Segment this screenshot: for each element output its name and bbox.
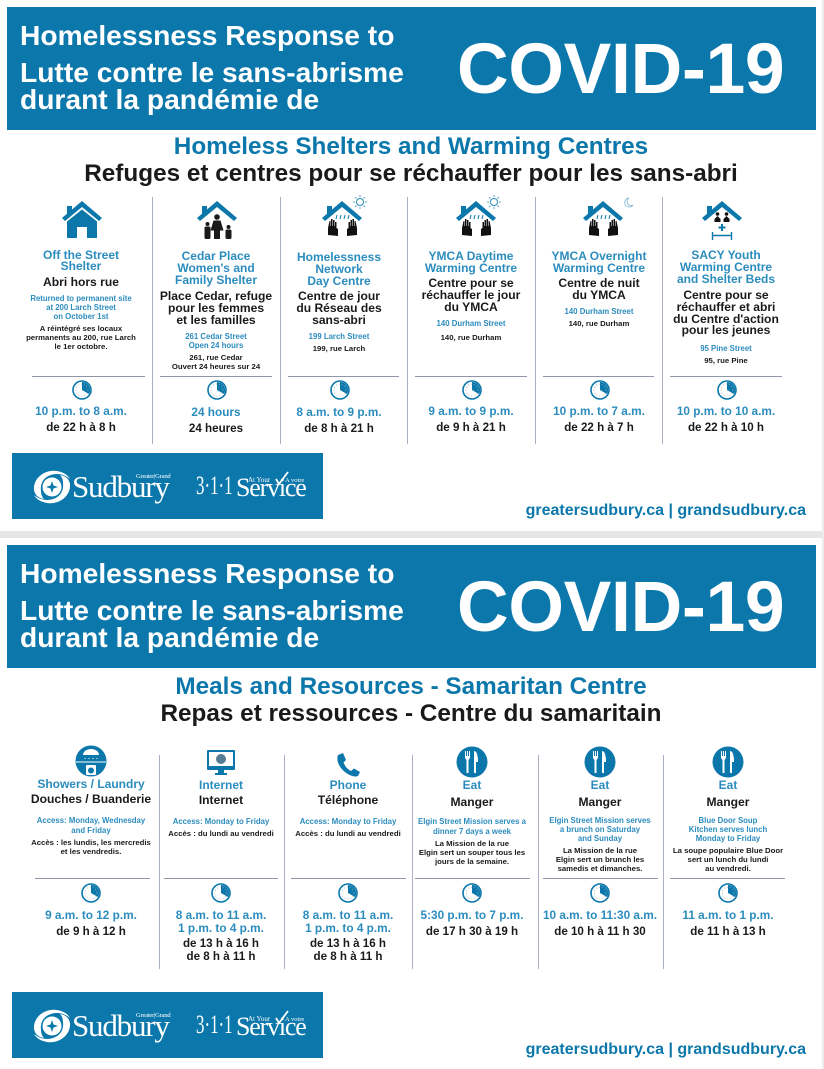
french name: du Centre d'action	[673, 312, 779, 326]
wordmark: Service: Service	[236, 1012, 306, 1041]
hours french	[146, 937, 296, 963]
french access	[31, 838, 151, 856]
hours french: de 13 h à 16 h	[310, 937, 386, 950]
hours english: 8 a.m. to 9 p.m.	[296, 405, 382, 419]
hours english: 11 a.m. to 1 p.m.	[682, 908, 774, 922]
wordmark: A votre: A votre	[285, 477, 304, 484]
hours english: 10 p.m. to 10 a.m.	[677, 404, 775, 418]
hours english: 10 p.m. to 8 a.m.	[35, 404, 127, 418]
clock icon	[717, 380, 737, 400]
french details: permanents au 200, rue Larch	[26, 333, 136, 342]
french address: 199, rue Larch	[313, 344, 365, 353]
icon: fork and knife	[584, 746, 616, 778]
section title: meals english: Meals and Resources - Samaritan Centre	[175, 673, 647, 700]
french name: Douches / Buanderie	[31, 792, 151, 806]
english address: 95 Pine Street	[700, 344, 752, 353]
centre name: Warming Centre	[425, 261, 517, 275]
column: Homelessness Network	[296, 195, 382, 435]
french name	[160, 289, 272, 327]
french name: pour les femmes	[168, 301, 264, 315]
shelter name: Cedar Place	[182, 249, 250, 263]
shelter name	[43, 248, 119, 273]
english details: a brunch on Saturday	[560, 825, 640, 834]
french name	[673, 288, 779, 337]
english address: 199 Larch Street	[309, 332, 369, 341]
header banner: meals: Homelessness Response to	[20, 557, 394, 589]
hours french: de 11 h à 13 h	[690, 925, 766, 938]
french name: du YMCA	[572, 288, 626, 302]
french name: Téléphone	[318, 793, 378, 807]
english details: 261 Cedar Street	[185, 332, 247, 341]
column: Showers / Laundry	[31, 746, 151, 938]
header banner: shelters: Homelessness Response to	[20, 19, 394, 51]
wordmark: 311: 3·1·1	[196, 1010, 233, 1039]
clock icon	[462, 380, 482, 400]
column: Eat, Blue Door	[663, 745, 793, 995]
french details: La Mission de la rue	[563, 846, 637, 855]
hours english: 24 hours	[191, 405, 241, 419]
french name: du YMCA	[444, 300, 498, 314]
hours english: 9 a.m. to 9 p.m.	[428, 404, 514, 418]
header banner: meals: durant la pandémie de	[20, 621, 319, 653]
french name: Centre de nuit	[558, 276, 640, 290]
clock icon	[462, 883, 482, 903]
header banner: shelters: COVID-19	[457, 29, 784, 109]
logo panel: shelters	[12, 453, 323, 519]
english details	[30, 294, 132, 321]
french name: Centre pour se	[428, 276, 514, 290]
hours french: de 17 h 30 à 19 h	[426, 925, 518, 938]
shelter name	[175, 249, 257, 287]
french details	[525, 846, 675, 874]
french details: La soupe populaire Blue Door	[673, 846, 783, 855]
website link: greatersudbury.ca | grandsudbury.ca	[526, 1041, 806, 1058]
header banner: shelters: Lutte contre le sans-abrisme	[20, 56, 404, 88]
wordmark: 311: 3·1·1	[196, 471, 233, 500]
hours english	[146, 909, 296, 935]
hours french: 24 heures	[189, 422, 243, 435]
hours french: de 8 h à 11 h	[187, 950, 255, 963]
french details: le 1er octobre.	[54, 342, 107, 351]
shelter name: Family Shelter	[175, 273, 257, 287]
hours english: 5:30 p.m. to 7 p.m.	[421, 908, 523, 922]
english address: 140 Durham Street	[437, 319, 505, 328]
french details: A réintégré ses locaux	[40, 324, 122, 333]
header banner: meals: COVID-19	[457, 567, 784, 647]
clock icon	[718, 883, 738, 903]
column: SACY Youth	[673, 201, 779, 434]
french address: 140, rue Durham	[569, 319, 629, 328]
french name: Centre pour se	[683, 288, 769, 302]
hours english: 9 a.m. to 12 p.m.	[45, 908, 137, 922]
french name	[558, 276, 640, 302]
centre name: Day Centre	[307, 274, 371, 288]
hours french: de 8 h à 21 h	[304, 422, 374, 435]
french details: sert un lunch du lundi	[688, 855, 768, 864]
centre name: Network	[315, 262, 363, 276]
clock icon	[590, 883, 610, 903]
icon: house with hands and moon	[583, 198, 634, 236]
centre name	[424, 249, 517, 275]
hours english: 8 a.m. to 11 a.m.	[303, 908, 393, 922]
column: Phone	[283, 745, 413, 995]
column: Off the Street Shelter	[26, 201, 136, 434]
french name: Place Cedar, refuge	[160, 289, 272, 303]
clock icon	[211, 883, 231, 903]
english details: Kitchen serves lunch	[689, 825, 767, 834]
english details: and Sunday	[578, 834, 622, 843]
wordmark: At Your: At Your	[248, 1015, 270, 1023]
english details: Open 24 hours	[189, 341, 243, 350]
service name: Eat	[591, 778, 609, 792]
hours french: de 9 h à 21 h	[436, 421, 506, 434]
centre name: Warming Centre	[553, 261, 645, 275]
service name: Phone	[330, 778, 366, 792]
french name: Internet	[199, 793, 243, 807]
english access: Access: Monday to Friday	[300, 817, 396, 826]
hours french: de 10 h à 11 h 30	[554, 925, 646, 938]
french name: Manger	[450, 795, 494, 809]
hours french: de 9 h à 12 h	[56, 925, 126, 938]
english access: and Friday	[71, 826, 111, 835]
french name: et les familles	[176, 313, 256, 327]
section title: meals french: Repas et ressources - Centre du samaritain	[160, 700, 661, 727]
centre name: and Shelter Beds	[677, 272, 775, 286]
shelter name: Shelter	[61, 259, 101, 273]
french name	[296, 289, 382, 327]
column: YMCA Daytime	[422, 195, 520, 434]
header banner: shelters	[7, 7, 816, 130]
english details	[525, 816, 675, 844]
english access: Access: Monday, Wednesday	[37, 816, 145, 825]
right page edge	[822, 0, 824, 1069]
header banner: meals: Lutte contre le sans-abrisme	[20, 594, 404, 626]
wordmark: Service: Service	[236, 473, 306, 502]
french access: et les vendredis.	[61, 847, 121, 856]
icon: Sudbury swirl	[34, 470, 70, 504]
hours french	[273, 937, 423, 963]
english access: Access: Monday to Friday	[173, 817, 269, 826]
english details: at 200 Larch Street	[46, 303, 116, 312]
french name: Centre de jour	[298, 289, 380, 303]
french details: Ouvert 24 heures sur 24	[172, 362, 260, 371]
clock icon	[72, 380, 92, 400]
service name: Eat	[463, 778, 481, 792]
french name: du Réseau des	[296, 301, 382, 315]
column: Eat, Elgin dinner	[407, 745, 537, 995]
wordmark: Greater Grand: Greater|Grand	[136, 473, 170, 480]
english access	[37, 816, 146, 835]
hours english: 10 p.m. to 7 a.m.	[553, 404, 645, 418]
french details	[172, 353, 260, 371]
gray separator between posters	[0, 531, 824, 538]
centre name	[552, 249, 646, 275]
hours english: 1 p.m. to 4 p.m.	[305, 921, 391, 935]
english details: Blue Door Soup	[699, 816, 757, 825]
french name: pour les jeunes	[682, 323, 770, 337]
column: Cedar Place	[160, 201, 272, 435]
english address: 140 Durham Street	[565, 307, 633, 316]
hours french: de 22 h à 7 h	[564, 421, 634, 434]
wordmark: Greater Grand: Greater|Grand	[136, 1012, 170, 1019]
french details: au vendredi.	[705, 864, 751, 873]
hours english	[273, 909, 423, 935]
service name: Internet	[199, 778, 243, 792]
french access: Accès : les lundis, les mercredis	[31, 838, 151, 847]
english details: Elgin Street Mission serves	[549, 816, 651, 825]
icon: fork and knife	[712, 746, 744, 778]
section title: shelters english: Homeless Shelters and Warming Centres	[174, 133, 648, 160]
column: Eat, Elgin brunch	[535, 745, 665, 995]
hours french: de 22 h à 10 h	[688, 421, 764, 434]
french details: La Mission de la rue	[435, 839, 509, 848]
website link: greatersudbury.ca | grandsudbury.ca	[526, 502, 806, 519]
french details: Elgin sert un souper tous les	[419, 848, 525, 857]
french name: réchauffer le jour	[422, 288, 520, 302]
wordmark: At Your: At Your	[248, 476, 270, 484]
wordmark: Sudbury: Sudbury	[72, 1008, 169, 1043]
clock icon	[207, 380, 227, 400]
french details: jours de la semaine.	[435, 857, 509, 866]
french details	[397, 839, 547, 867]
clock icon	[330, 380, 350, 400]
centre name	[677, 248, 775, 286]
hours english: 8 a.m. to 11 a.m.	[176, 908, 266, 922]
wordmark: Sudbury: Sudbury	[72, 469, 169, 504]
icon: shower and washer	[76, 746, 106, 776]
english details	[653, 816, 803, 844]
icon: house	[62, 201, 102, 238]
french details	[26, 324, 136, 351]
english details	[397, 817, 547, 837]
centre name: SACY Youth	[691, 248, 761, 262]
english details: Returned to permanent site	[30, 294, 132, 303]
column: Internet	[156, 745, 286, 995]
centre name	[297, 250, 381, 288]
hours french: de 8 h à 11 h	[314, 950, 382, 963]
french name: réchauffer et abri	[677, 300, 775, 314]
icon: Sudbury swirl	[33, 1008, 71, 1044]
clock icon	[81, 883, 101, 903]
centre name: Homelessness	[297, 250, 381, 264]
icon: check mark	[274, 1010, 289, 1024]
hours french: de 13 h à 16 h	[183, 937, 259, 950]
hours french: de 22 h à 8 h	[46, 421, 116, 434]
icon: house with family	[197, 201, 237, 239]
french access: Accès : du lundi au vendredi	[295, 829, 401, 838]
icon: phone handset	[336, 752, 361, 778]
french details: Elgin sert un brunch les	[556, 855, 644, 864]
centre name: YMCA Daytime	[429, 249, 513, 263]
french address: 140, rue Durham	[441, 333, 501, 342]
english details: on October 1st	[53, 312, 109, 321]
english details: dinner 7 days a week	[433, 827, 511, 836]
icon: fork and knife	[456, 746, 488, 778]
english details	[185, 332, 247, 350]
french name: Manger	[578, 795, 622, 809]
hours english: 10 a.m. to 11:30 a.m.	[543, 908, 657, 922]
centre name: YMCA Overnight	[552, 249, 646, 263]
logo panel: meals	[12, 992, 323, 1058]
clock icon	[338, 883, 358, 903]
header banner: meals	[7, 545, 816, 668]
icon: house with hands and sun	[456, 195, 501, 236]
centre name: Warming Centre	[680, 260, 772, 274]
wordmark: A votre: A votre	[285, 1016, 304, 1023]
french details	[653, 846, 803, 874]
shelter name: Women's and	[177, 261, 255, 275]
shelter name: Off the Street	[43, 248, 119, 262]
french details: samedis et dimanches.	[558, 864, 642, 873]
french details: 261, rue Cedar	[189, 353, 243, 362]
service name: Showers / Laundry	[37, 777, 145, 791]
french name	[422, 276, 520, 314]
icon: check mark	[275, 472, 289, 486]
french name: Abri hors rue	[43, 275, 119, 289]
section title: shelters french: Refuges et centres pour se réchauffer pour les sans-abri	[84, 160, 738, 187]
header banner: shelters: durant la pandémie de	[20, 83, 319, 115]
french access: Accès : du lundi au vendredi	[168, 829, 274, 838]
french address: 95, rue Pine	[704, 356, 748, 365]
service name: Eat	[719, 778, 737, 792]
icon: house with hands and sun	[322, 195, 367, 236]
french name: sans-abri	[312, 313, 366, 327]
icon: house with people and bed	[702, 201, 742, 240]
english details: Monday to Friday	[696, 834, 760, 843]
icon: monitor	[206, 749, 236, 777]
column: YMCA Overnight	[552, 198, 646, 434]
french name: Manger	[706, 795, 750, 809]
hours english: 1 p.m. to 4 p.m.	[178, 921, 264, 935]
clock icon	[590, 380, 610, 400]
english details: Elgin Street Mission serves a	[418, 817, 526, 826]
